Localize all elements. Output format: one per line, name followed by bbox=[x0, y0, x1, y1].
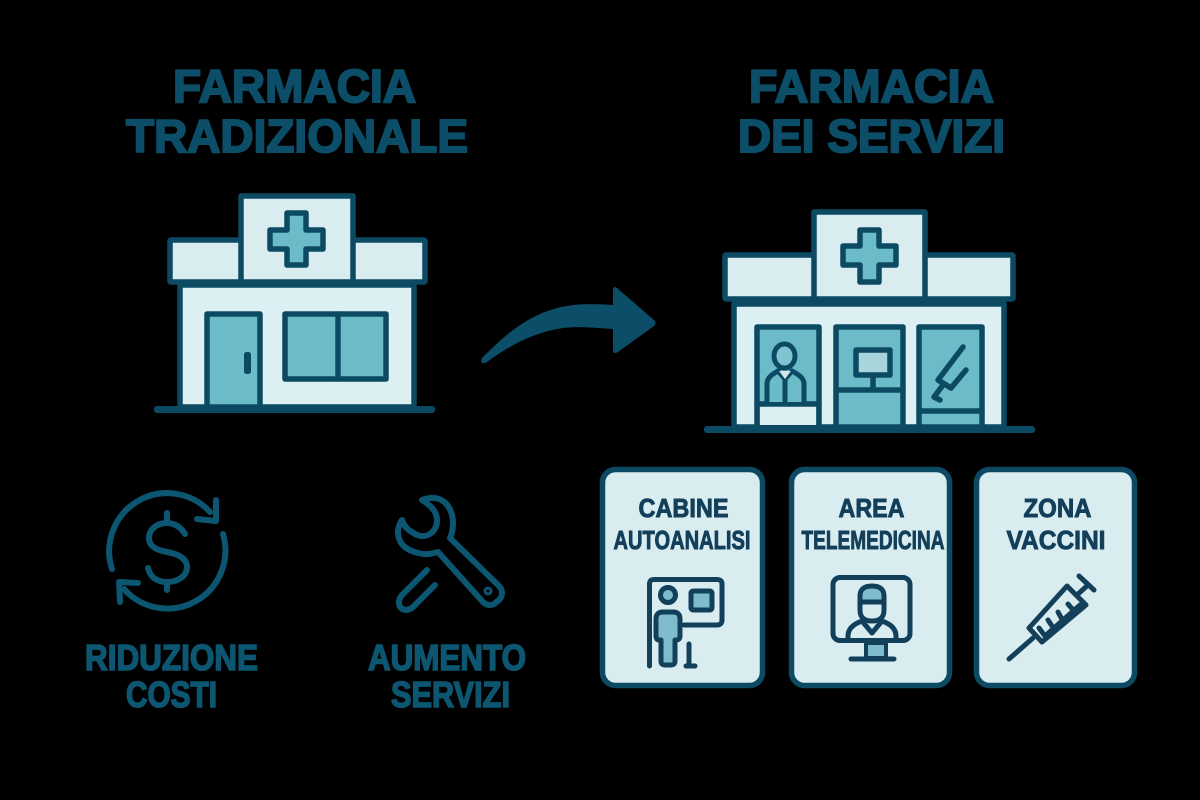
card text bbox=[802, 493, 945, 555]
door bbox=[207, 314, 260, 407]
card text: CABINE bbox=[638, 493, 728, 523]
icon: cost reduction bbox=[109, 493, 225, 609]
card text: AUTOANALISI bbox=[614, 525, 750, 555]
icon: syringe bbox=[1009, 576, 1094, 659]
panel: area telemedicina bbox=[792, 470, 950, 686]
title: farmacia tradizionale: TRADIZIONALE bbox=[126, 110, 468, 162]
panel: zona vaccini bbox=[976, 470, 1134, 686]
traditional pharmacy building bbox=[154, 196, 435, 413]
title: farmacia dei servizi bbox=[738, 60, 1005, 162]
title: farmacia tradizionale: FARMACIA bbox=[173, 60, 416, 112]
ground line bbox=[704, 426, 1035, 433]
title: farmacia dei servizi: DEI SERVIZI bbox=[738, 110, 1005, 162]
panel: syringe window bbox=[919, 327, 982, 427]
panel: cabine autoanalisi bbox=[602, 470, 762, 686]
label: riduzione costi: COSTI bbox=[126, 674, 217, 715]
panel: monitor window bbox=[836, 327, 903, 427]
panel: pharmacist window bbox=[757, 327, 819, 427]
cross sign bbox=[270, 213, 323, 265]
service pharmacy building bbox=[704, 212, 1035, 433]
card text: ZONA bbox=[1024, 493, 1092, 523]
card text: VACCINI bbox=[1006, 525, 1106, 555]
title: farmacia dei servizi: FARMACIA bbox=[749, 60, 994, 112]
window bbox=[285, 314, 386, 379]
ground line bbox=[154, 406, 435, 413]
icon: wrench bbox=[398, 498, 502, 610]
label: aumento servizi: AUMENTO bbox=[368, 637, 526, 678]
icon: booth with person bbox=[650, 580, 722, 666]
icon: doctor on monitor bbox=[833, 578, 910, 659]
cross sign bbox=[843, 230, 896, 282]
card text bbox=[1006, 493, 1106, 555]
title: farmacia tradizionale bbox=[126, 60, 468, 162]
curved arrow bbox=[481, 287, 656, 363]
label: riduzione costi: RIDUZIONE bbox=[85, 637, 258, 678]
card text: TELEMEDICINA bbox=[802, 525, 945, 555]
label: aumento servizi: SERVIZI bbox=[391, 674, 510, 715]
label: riduzione costi bbox=[85, 637, 258, 715]
card text bbox=[614, 493, 750, 555]
card text: AREA bbox=[838, 493, 905, 523]
label: aumento servizi bbox=[368, 637, 526, 715]
